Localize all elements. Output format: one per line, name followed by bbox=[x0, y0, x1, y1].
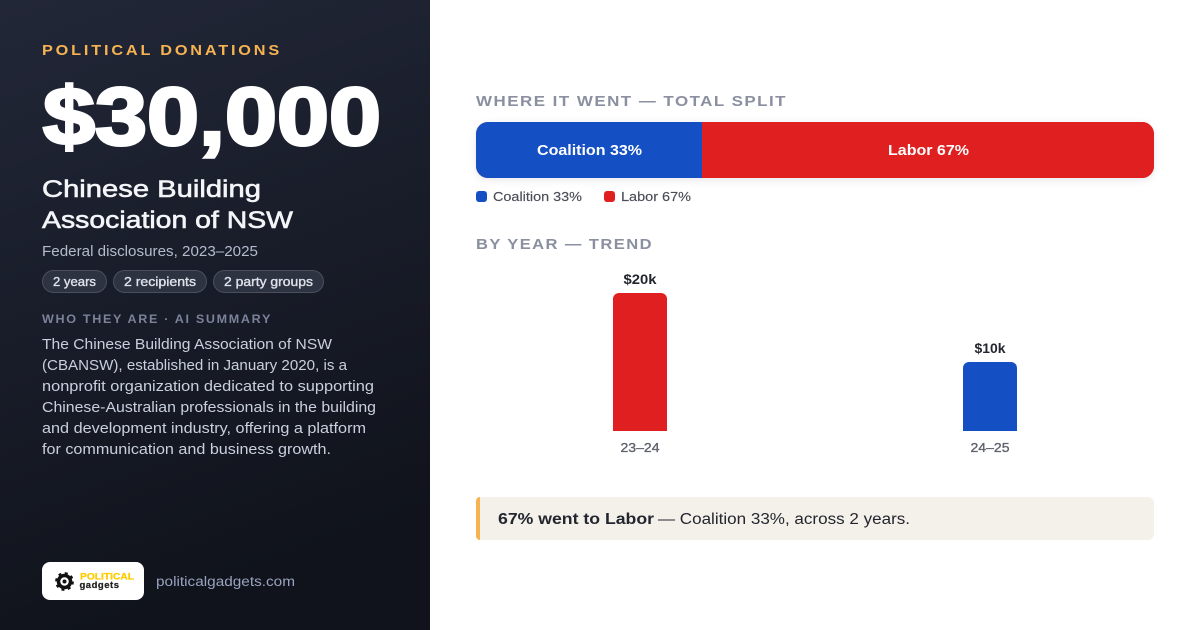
donor name: Association of NSW bbox=[42, 207, 294, 234]
summary text: and development industry, offering a platform bbox=[42, 421, 366, 437]
summary text: nonprofit organization dedicated to supporting bbox=[42, 379, 374, 395]
bar label: Coalition: Coalition 33% bbox=[537, 143, 642, 159]
donation total: $30,000 bbox=[43, 72, 381, 162]
website: politicalgadgets.com bbox=[156, 574, 295, 589]
heading: total split: WHERE IT WENT — TOTAL SPLIT bbox=[476, 93, 787, 110]
stat pills: 2 years bbox=[53, 275, 96, 289]
legend: Labor 67% bbox=[621, 189, 691, 204]
stat pills: 2 party groups bbox=[224, 275, 313, 289]
bar 23–24: 23–24 bbox=[620, 440, 660, 455]
legend bbox=[476, 189, 691, 204]
bar 24–25: $10k bbox=[974, 341, 1006, 356]
stacked bar: total split bbox=[476, 122, 1154, 178]
donor name: Chinese Building bbox=[42, 176, 261, 203]
eyebrow heading: POLITICAL DONATIONS bbox=[42, 42, 282, 59]
heading: by year: BY YEAR — TREND bbox=[476, 236, 653, 253]
stat pills: 2 recipients bbox=[124, 275, 196, 289]
callout bbox=[476, 497, 1154, 540]
legend: Coalition 33% bbox=[493, 189, 582, 204]
bar 24–25 bbox=[963, 341, 1017, 455]
logo wordmark bbox=[80, 572, 135, 590]
summary text: The Chinese Building Association of NSW bbox=[42, 337, 332, 353]
bar 23–24 bbox=[613, 272, 667, 455]
logo badge bbox=[42, 562, 144, 600]
callout: 67% went to Labor bbox=[498, 511, 654, 528]
icon: gear bbox=[56, 573, 73, 590]
panel: left summary bbox=[0, 0, 430, 630]
summary text: Chinese-Australian professionals in the building bbox=[42, 400, 376, 416]
bar chart: by year bbox=[613, 272, 1017, 455]
summary heading: WHO THEY ARE · AI SUMMARY bbox=[42, 312, 272, 326]
callout: — Coalition 33%, across 2 years. bbox=[658, 511, 910, 528]
bar 23–24: $20k bbox=[624, 272, 657, 287]
logo wordmark: POLITICAL bbox=[80, 572, 135, 582]
summary text: for communication and business growth. bbox=[42, 442, 331, 458]
stat pills bbox=[42, 270, 324, 292]
bar label: Labor: Labor 67% bbox=[888, 143, 969, 159]
logo wordmark: gadgets bbox=[80, 580, 120, 590]
summary text bbox=[42, 337, 376, 458]
donor name bbox=[42, 176, 294, 234]
subtitle: Federal disclosures, 2023–2025 bbox=[42, 244, 258, 260]
bar 24–25: 24–25 bbox=[970, 440, 1010, 455]
summary text: (CBANSW), established in January 2020, is a bbox=[42, 358, 348, 374]
